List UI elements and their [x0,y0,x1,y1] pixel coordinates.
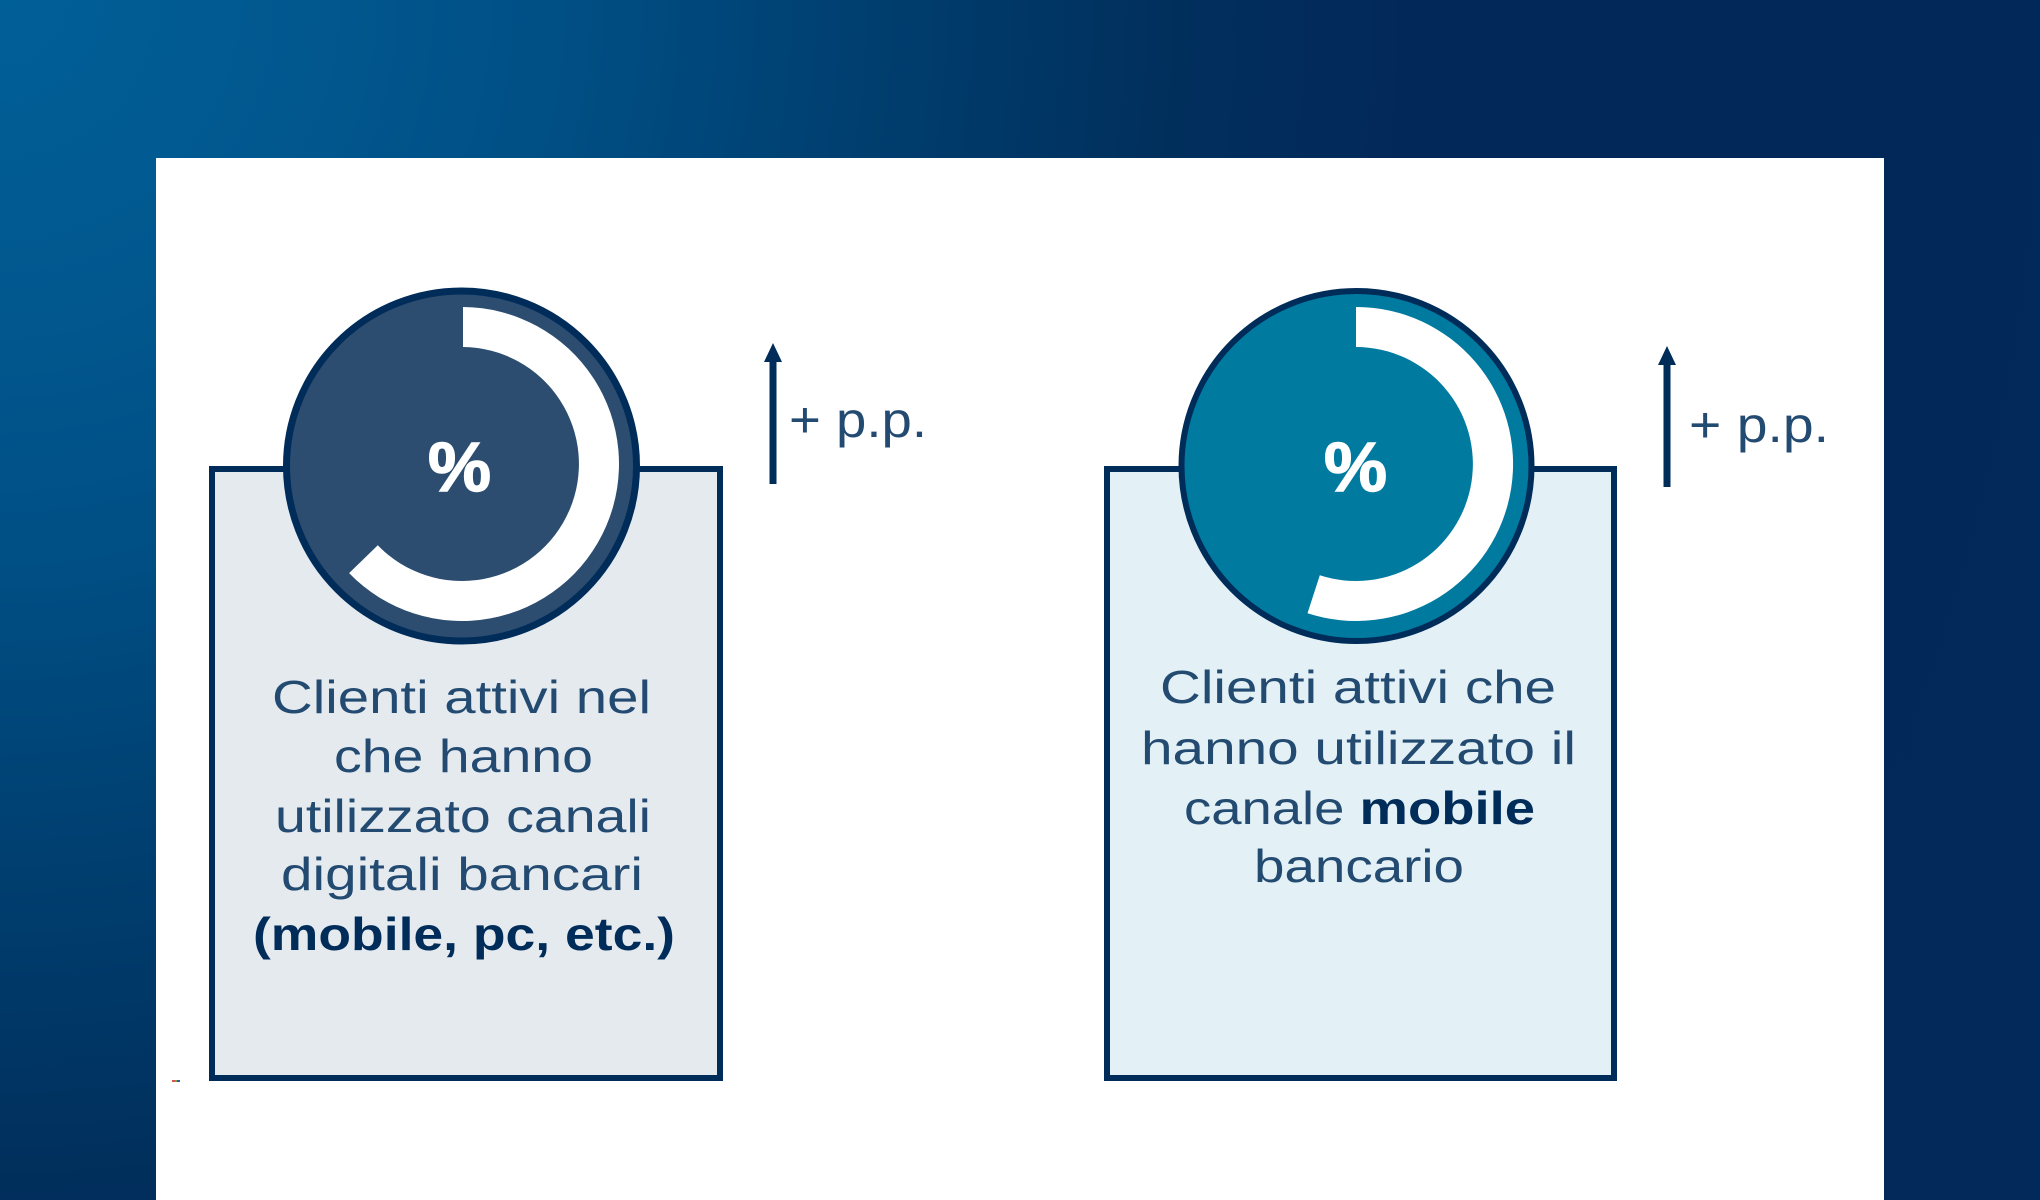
donut gauge: mobile channel [1182,291,1532,641]
text card: mobile channel [1107,469,1614,1078]
description: mobile channel: bancario [1254,840,1464,892]
percentage points label: mobile channel: + p.p. [1689,397,1829,453]
description: digital channels: Clienti attivi nel [272,671,651,723]
description: digital channels: digitali bancari [281,848,643,900]
description: digital channels: che hanno [334,730,593,782]
panel: mobile channel [1107,291,1829,1078]
donut gauge: digital channels: % [428,428,491,506]
description: mobile channel: Clienti attivi che [1160,661,1556,713]
donut gauge: mobile channel: % [1324,428,1387,506]
description: digital channels [253,671,675,960]
arrow up: digital channels [764,343,782,484]
percentage points label: digital channels: + p.p. [789,392,927,448]
description: mobile channel: canale mobile [1184,782,1535,834]
description: digital channels: (mobile, pc, etc.) [253,908,675,960]
small artifact mark [172,1080,180,1082]
panel: digital channels [212,291,927,1078]
description: digital channels: utilizzato canali [275,790,651,842]
arrow up: mobile channel [1658,346,1676,487]
white content panel [156,158,1884,1200]
donut gauge: digital channels [286,291,636,641]
description: mobile channel: hanno utilizzato il [1141,722,1576,774]
text card: digital channels [212,469,720,1078]
description: mobile channel [1141,661,1576,892]
